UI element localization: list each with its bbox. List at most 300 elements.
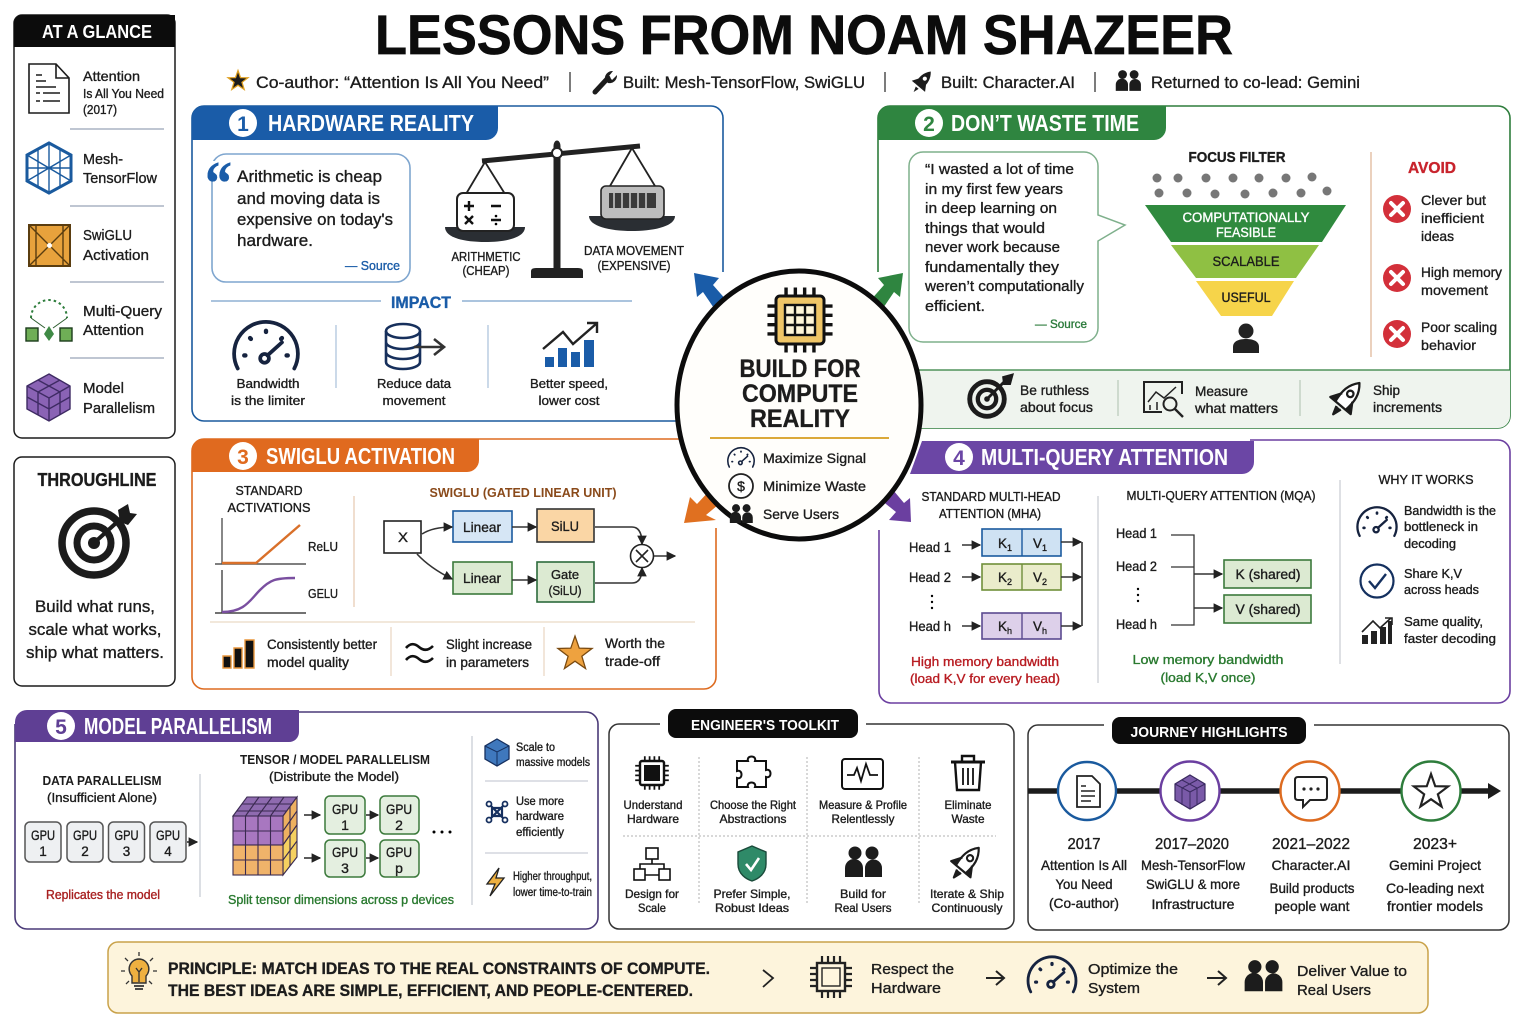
tool: simple ideas: Prefer Simple, <box>714 887 790 901</box>
mha diagram: 1 <box>1042 543 1047 553</box>
heading: hardware reality: HARDWARE REALITY <box>268 110 474 136</box>
tool: measure: Measure & Profile <box>819 798 907 812</box>
panel 1: hardware reality <box>192 106 723 421</box>
mha diagram: V <box>1033 619 1042 634</box>
milestone 2017 <box>1041 762 1127 911</box>
icon: rising chart <box>543 323 597 367</box>
benefit: scale: Scale to <box>516 742 555 754</box>
text: throughline message: Build what runs, <box>35 597 155 616</box>
item: minimize waste: $ <box>737 478 745 494</box>
text: throughline message <box>26 597 164 662</box>
item: maximize signal: Maximize Signal <box>763 450 866 466</box>
action: ship: increments <box>1373 399 1442 415</box>
heading: swiglu activation: 3 <box>237 446 249 469</box>
data parallel gpus: 4 <box>164 844 172 859</box>
quote bubble: — Source <box>1035 317 1087 331</box>
tool: iterate: Iterate & Ship <box>930 887 1004 901</box>
icon: chip <box>767 287 833 353</box>
chart: relu <box>215 518 338 564</box>
text: throughline message: scale what works, <box>28 620 162 639</box>
icon: person <box>1233 324 1259 353</box>
tensor gpus: GPU <box>386 844 412 860</box>
milestone 2017: You Need <box>1056 876 1112 892</box>
heading: hardware reality <box>192 106 498 140</box>
panel 5: model parallelism <box>15 710 598 929</box>
funnel: USEFUL <box>1222 290 1271 305</box>
avoid item: memory: High memory <box>1421 264 1502 280</box>
step: optimize system <box>1028 957 1178 997</box>
arrow: to swiglu <box>684 488 724 523</box>
scale label: arithmetic <box>452 250 520 278</box>
item: serve users: Serve Users <box>763 506 839 522</box>
heading: at a glance <box>14 15 175 47</box>
icon: model cube <box>27 374 70 421</box>
icon: database arrow <box>386 324 444 369</box>
chart: relu: ReLU <box>308 539 338 554</box>
heading: standard activations <box>228 483 311 515</box>
text: model parallelism <box>83 380 155 417</box>
swiglu flow diagram: SiLU <box>551 518 579 534</box>
quote box: — Source <box>345 259 400 273</box>
heading: impact: IMPACT <box>391 294 451 312</box>
step: deliver value: Deliver Value to <box>1297 963 1407 980</box>
heading: data parallelism <box>42 773 162 805</box>
mqa diagram: Head h <box>1116 617 1157 632</box>
why: bandwidth: Bandwidth is the <box>1404 504 1496 518</box>
action: ruthless focus: about focus <box>1020 399 1093 415</box>
heading: engineer's toolkit: ENGINEER'S TOOLKIT <box>691 718 839 734</box>
avoid item: clever: Clever but <box>1421 192 1486 208</box>
caption: replicates: Replicates the model <box>46 888 160 902</box>
panel: throughline <box>14 457 175 686</box>
heading: focus filter: FOCUS FILTER <box>1188 150 1286 166</box>
mha diagram: K <box>998 619 1007 634</box>
tool: measure <box>819 759 907 826</box>
mha diagram: Head 1 <box>909 540 951 555</box>
quote box: “ <box>205 150 232 218</box>
benefit: quality <box>223 637 377 670</box>
swiglu flow diagram: Gate <box>551 567 579 582</box>
heading: throughline: THROUGHLINE <box>38 470 156 490</box>
heading: mha <box>922 490 1060 521</box>
step: optimize system: System <box>1088 980 1140 997</box>
tool: design for scale: Scale <box>638 901 666 915</box>
milestone 2017-2020: SwiGLU & more <box>1146 876 1240 892</box>
quote bubble: never work because <box>925 239 1060 256</box>
milestone 2023: Co-leading next <box>1386 880 1484 896</box>
avoid item: clever: inefficient <box>1421 210 1484 226</box>
heading: data parallelism: DATA PARALLELISM <box>42 773 162 788</box>
funnel: COMPUTATIONALLY <box>1182 210 1310 225</box>
benefit: trade-off <box>558 636 665 669</box>
heading: why it works: WHY IT WORKS <box>1378 472 1474 487</box>
swiglu flow diagram: X <box>398 529 409 545</box>
benefit: throughput <box>487 868 592 899</box>
why: quality <box>1362 615 1496 646</box>
caption: high memory <box>910 654 1060 686</box>
quote bubble: in my first few years <box>925 181 1063 198</box>
mha diagram: V <box>1033 570 1042 585</box>
title: LESSONS FROM NOAM SHAZEER <box>375 3 1233 66</box>
caption: low memory: (load K,V once) <box>1160 670 1256 685</box>
heading: model parallelism <box>15 710 299 742</box>
item: minimize waste <box>729 474 866 498</box>
action: measure: what matters <box>1194 400 1278 416</box>
connector arrows <box>684 273 911 523</box>
why: quality: Same quality, <box>1404 615 1483 629</box>
milestone 2017-2020: Infrastructure <box>1152 896 1235 912</box>
quote bubble <box>909 152 1125 342</box>
swiglu flow diagram <box>384 509 675 602</box>
caption: low memory <box>1132 652 1284 685</box>
data parallel gpus: GPU <box>114 828 138 843</box>
milestone 2017-2020: Mesh-TensorFlow <box>1141 857 1246 873</box>
tool: eliminate: Eliminate <box>944 798 992 812</box>
text: mesh tensorflow: Mesh- <box>83 151 123 168</box>
heading: data parallelism: (Insufficient Alone) <box>47 790 157 805</box>
benefit: quality: Consistently better <box>267 637 377 652</box>
benefit: parameters: in parameters <box>446 655 529 670</box>
caption: split tensor: Split tensor dimensions across p devices <box>228 893 454 907</box>
tool: eliminate: Waste <box>952 812 985 826</box>
panel 2: don't waste time <box>878 106 1510 428</box>
step: deliver value: Real Users <box>1297 982 1371 999</box>
text: reduce data: movement <box>382 393 446 408</box>
data parallel gpus: 1 <box>39 844 47 859</box>
text: swiglu: SwiGLU <box>83 227 132 244</box>
heading: standard activations: STANDARD <box>236 483 302 498</box>
data parallel gpus: GPU <box>156 828 180 843</box>
tensor gpus: 1 <box>341 817 349 833</box>
tool: real users: Build for <box>840 887 886 901</box>
tool: measure: Relentlessly <box>832 812 894 826</box>
milestone 2021-2022: Character.AI <box>1272 857 1350 873</box>
why: bandwidth: decoding <box>1404 537 1456 551</box>
icon: gauge <box>234 322 298 368</box>
step: optimize system: Optimize the <box>1088 961 1178 978</box>
milestone 2017: (Co-author) <box>1049 895 1119 911</box>
text: model parallelism: Model <box>83 380 124 397</box>
tensor gpus: GPU <box>332 844 358 860</box>
heading: don't waste time: 2 <box>923 113 935 136</box>
milestone 2017-2020 <box>1141 762 1246 912</box>
tensor gpus <box>304 796 452 877</box>
scale label: arithmetic: (CHEAP) <box>462 264 510 278</box>
tool: understand hardware <box>624 756 682 826</box>
tool: real users: Real Users <box>834 901 892 915</box>
benefit: hardware <box>486 796 564 839</box>
scale label: data movement: (EXPENSIVE) <box>598 259 670 273</box>
tool: abstractions: Choose the Right <box>710 798 797 812</box>
heading: build for compute reality: COMPUTE <box>742 380 858 408</box>
quote bubble: things that would <box>925 220 1045 237</box>
heading: at a glance: AT A GLANCE <box>42 22 152 42</box>
tool: iterate: Continuously <box>932 901 1002 915</box>
heading: journey highlights <box>1104 712 1314 744</box>
heading: hardware reality: 1 <box>237 113 249 136</box>
avoid item: clever: ideas <box>1421 228 1454 244</box>
data parallel gpus: GPU <box>31 828 55 843</box>
text: bandwidth: Bandwidth <box>236 376 300 391</box>
heading: multi-query attention <box>910 441 1254 474</box>
filter dots <box>1152 172 1332 198</box>
heading: engineer's toolkit <box>660 709 866 738</box>
chart: gelu <box>215 570 338 613</box>
tensor gpus: 3 <box>341 860 349 876</box>
heading: tensor parallelism: TENSOR / MODEL PARALLELISM <box>240 752 430 767</box>
balance scale <box>445 141 675 278</box>
heading: mqa: MULTI-QUERY ATTENTION (MQA) <box>1126 489 1316 503</box>
step: respect hardware: Hardware <box>871 980 941 997</box>
text: reduce data: Reduce data <box>377 376 452 391</box>
avoid item: memory: movement <box>1421 282 1488 298</box>
tensor gpus: p <box>395 860 403 876</box>
benefit: scale: massive models <box>516 757 590 769</box>
tool: understand hardware: Understand <box>624 798 682 812</box>
text: multi-query <box>83 303 163 339</box>
funnel: FEASIBLE <box>1216 225 1276 240</box>
milestone 2017: 2017 <box>1068 836 1100 853</box>
data parallel gpus: GPU <box>73 828 97 843</box>
swiglu flow diagram: Linear <box>463 519 501 535</box>
text: attention: (2017) <box>83 103 117 117</box>
credential: built: Built: Mesh-TensorFlow, SwiGLU <box>623 73 865 92</box>
panel: at a glance <box>14 15 175 438</box>
text: multi-query: Attention <box>83 322 144 339</box>
heading: don't waste time <box>878 106 1166 140</box>
tool: real users <box>834 846 892 915</box>
chevron <box>763 970 773 987</box>
icon: mesh <box>27 143 71 193</box>
principle text: THE BEST IDEAS ARE SIMPLE, EFFICIENT, AND PEOPLE-CENTERED. <box>168 982 693 1000</box>
milestone 2021-2022: 2021–2022 <box>1272 836 1350 853</box>
heading: build for compute reality <box>740 355 860 433</box>
arrow: to time <box>862 273 903 320</box>
tool: iterate <box>930 840 1004 915</box>
benefit: parameters <box>406 637 532 670</box>
text: better speed: Better speed, <box>530 376 608 391</box>
action: measure: Measure <box>1195 383 1248 399</box>
heading: tensor parallelism <box>240 752 430 784</box>
why: quality: faster decoding <box>1404 632 1496 646</box>
icon: document <box>29 64 69 113</box>
text: reduce data <box>377 376 452 408</box>
heading: mha: ATTENTION (MHA) <box>939 507 1041 521</box>
panel: journey highlights <box>1028 712 1509 930</box>
quote bubble: efficient. <box>925 298 985 315</box>
step: respect hardware: Respect the <box>871 961 954 978</box>
benefit: parameters: Slight increase <box>446 637 532 652</box>
swiglu flow diagram: (SiLU) <box>548 583 582 598</box>
icon: swiglu <box>29 225 70 266</box>
mqa diagram: Head 1 <box>1116 526 1157 541</box>
why: bandwidth <box>1357 504 1496 551</box>
arrow <box>1207 971 1226 985</box>
tool: abstractions: Abstractions <box>720 812 786 826</box>
quote bubble: in deep learning on <box>925 200 1057 217</box>
mha diagram: Head h <box>909 619 951 634</box>
text: bandwidth: is the limiter <box>231 393 306 408</box>
bottom action band <box>915 370 1510 428</box>
arrow: to mqa <box>876 484 911 522</box>
heading: tensor parallelism: (Distribute the Model) <box>269 769 399 784</box>
milestone 2023: frontier models <box>1387 898 1483 914</box>
credential: co-author: Co-author: “Attention Is All You Need” <box>256 73 549 92</box>
central hub <box>677 271 921 539</box>
quote bubble: fundamentally they <box>925 259 1060 276</box>
chart: gelu: GELU <box>308 586 338 601</box>
tensor gpus: GPU <box>332 801 358 817</box>
text: swiglu <box>83 227 149 264</box>
caption: high memory: High memory bandwidth <box>911 654 1059 669</box>
benefit: hardware: Use more <box>516 796 564 808</box>
item: serve users <box>730 504 839 523</box>
heading: avoid: AVOID <box>1408 160 1456 177</box>
quote box: and moving data is <box>237 189 380 208</box>
text: better speed <box>530 376 608 408</box>
benefit: throughput: Higher throughput, <box>513 871 592 883</box>
heading: multi-query attention: 4 <box>953 447 965 470</box>
milestone 2021-2022: Build products <box>1270 880 1354 896</box>
tensor cube <box>233 797 297 875</box>
why: share: across heads <box>1404 583 1479 597</box>
scale label: data movement <box>584 244 684 273</box>
icon: rocket <box>907 66 937 98</box>
milestone 2023 <box>1386 762 1484 914</box>
text: attention: Is All You Need <box>83 87 164 101</box>
icon: people <box>1116 70 1141 91</box>
action: measure <box>1144 382 1278 417</box>
panel: engineer's toolkit <box>609 709 1014 929</box>
mha diagram: 2 <box>1007 577 1012 587</box>
quote bubble: weren’t computationally <box>924 278 1085 295</box>
benefit: trade-off: trade-off <box>605 654 660 669</box>
text: mesh tensorflow <box>83 151 157 187</box>
principle text: PRINCIPLE: MATCH IDEAS TO THE REAL CONSTRAINTS OF COMPUTE. <box>168 960 710 978</box>
scale label: arithmetic: ARITHMETIC <box>452 250 520 264</box>
benefit: quality: model quality <box>267 655 349 670</box>
text: attention <box>83 68 164 117</box>
benefit: scale <box>485 739 590 769</box>
heading: swiglu activation: SWIGLU ACTIVATION <box>266 443 455 469</box>
panel 4: multi-query attention <box>879 440 1510 703</box>
tool: eliminate <box>944 756 992 826</box>
why: share: Share K,V <box>1404 567 1463 581</box>
data parallel gpus: 2 <box>81 844 89 859</box>
text: attention: Attention <box>83 68 140 84</box>
action: ship: Ship <box>1373 382 1400 398</box>
action: ship <box>1323 374 1442 423</box>
avoid item: scaling: Poor scaling <box>1421 319 1497 335</box>
data parallel gpus: 3 <box>123 844 130 859</box>
avoid item: clever <box>1383 192 1486 244</box>
heading: multi-query attention: MULTI-QUERY ATTENTION <box>981 444 1228 470</box>
quote bubble: “I wasted a lot of time <box>925 161 1074 178</box>
tool: abstractions <box>710 756 797 826</box>
benefit: throughput: lower time-to-train <box>513 887 592 899</box>
icon: star <box>228 70 248 89</box>
mha diagram: h <box>1007 626 1012 636</box>
mha diagram <box>909 529 1082 639</box>
heading: swiglu activation <box>192 439 479 472</box>
icon: target <box>62 504 137 575</box>
swiglu flow diagram: Linear <box>463 570 501 586</box>
tool: simple ideas <box>714 846 790 915</box>
mha diagram: V <box>1033 536 1042 551</box>
quote box: expensive on today's <box>237 210 393 229</box>
mha diagram: 1 <box>1007 543 1012 553</box>
mqa diagram: K (shared) <box>1236 567 1300 582</box>
tool: design for scale <box>625 848 679 915</box>
milestone 2023: Gemini Project <box>1389 857 1481 873</box>
caption: high memory: (load K,V for every head) <box>910 671 1060 686</box>
arrow <box>986 971 1004 985</box>
avoid item: scaling <box>1383 319 1497 353</box>
text: better speed: lower cost <box>538 393 600 408</box>
heading: build for compute reality: BUILD FOR <box>740 355 860 383</box>
text: multi-query: Multi-Query <box>83 303 163 320</box>
text: model parallelism: Parallelism <box>83 400 155 417</box>
timeline arrow <box>1028 783 1501 799</box>
avoid item: scaling: behavior <box>1421 337 1476 353</box>
credential: character: Built: Character.AI <box>941 73 1075 92</box>
avoid item: memory <box>1383 264 1502 298</box>
mha diagram: K <box>998 570 1007 585</box>
why: bandwidth: bottleneck in <box>1404 520 1478 534</box>
text: throughline message: ship what matters. <box>26 643 164 662</box>
item: maximize signal <box>728 448 866 467</box>
subtitle credentials bar <box>228 66 1360 98</box>
step: respect hardware <box>810 956 954 998</box>
caption: low memory: Low memory bandwidth <box>1132 652 1284 667</box>
mha diagram: 2 <box>1042 577 1047 587</box>
why: share <box>1360 564 1479 598</box>
item: minimize waste: Minimize Waste <box>763 478 866 494</box>
icon: multi-query <box>26 300 72 341</box>
funnel <box>1145 205 1346 316</box>
icon: wrench <box>595 71 617 92</box>
mqa diagram: V (shared) <box>1236 602 1300 617</box>
heading: model parallelism: MODEL PARALLELISM <box>84 713 272 739</box>
data parallel gpus <box>25 822 197 862</box>
heading: build for compute reality: REALITY <box>750 405 850 433</box>
heading: swiglu gated linear unit: SWIGLU (GATED LINEAR UNIT) <box>430 486 616 500</box>
mha diagram: K <box>998 536 1007 551</box>
mqa diagram <box>1116 526 1311 632</box>
principle banner <box>108 942 1428 1013</box>
funnel: SCALABLE <box>1212 254 1280 269</box>
quote box: Arithmetic is cheap <box>237 167 382 186</box>
heading: standard activations: ACTIVATIONS <box>228 500 311 515</box>
action: ruthless focus: Be ruthless <box>1020 382 1089 398</box>
benefit: hardware: efficiently <box>516 827 564 839</box>
milestone 2021-2022 <box>1270 762 1354 914</box>
heading: model parallelism: 5 <box>55 716 67 739</box>
credential: gemini: Returned to co-lead: Gemini <box>1151 73 1360 92</box>
heading: don't waste time: DON’T WASTE TIME <box>951 110 1139 136</box>
mha diagram: Head 2 <box>909 570 951 585</box>
panel 3: swiglu activation <box>192 439 716 689</box>
tensor gpus: 2 <box>395 817 403 833</box>
tool: understand hardware: Hardware <box>627 812 679 826</box>
tensor gpus: GPU <box>386 801 412 817</box>
quote box: hardware. <box>237 231 313 250</box>
milestone 2023: 2023+ <box>1413 836 1457 853</box>
mha diagram: h <box>1042 626 1047 636</box>
text: bandwidth <box>231 376 306 408</box>
tool: simple ideas: Robust Ideas <box>715 901 789 915</box>
quote box <box>205 150 410 282</box>
